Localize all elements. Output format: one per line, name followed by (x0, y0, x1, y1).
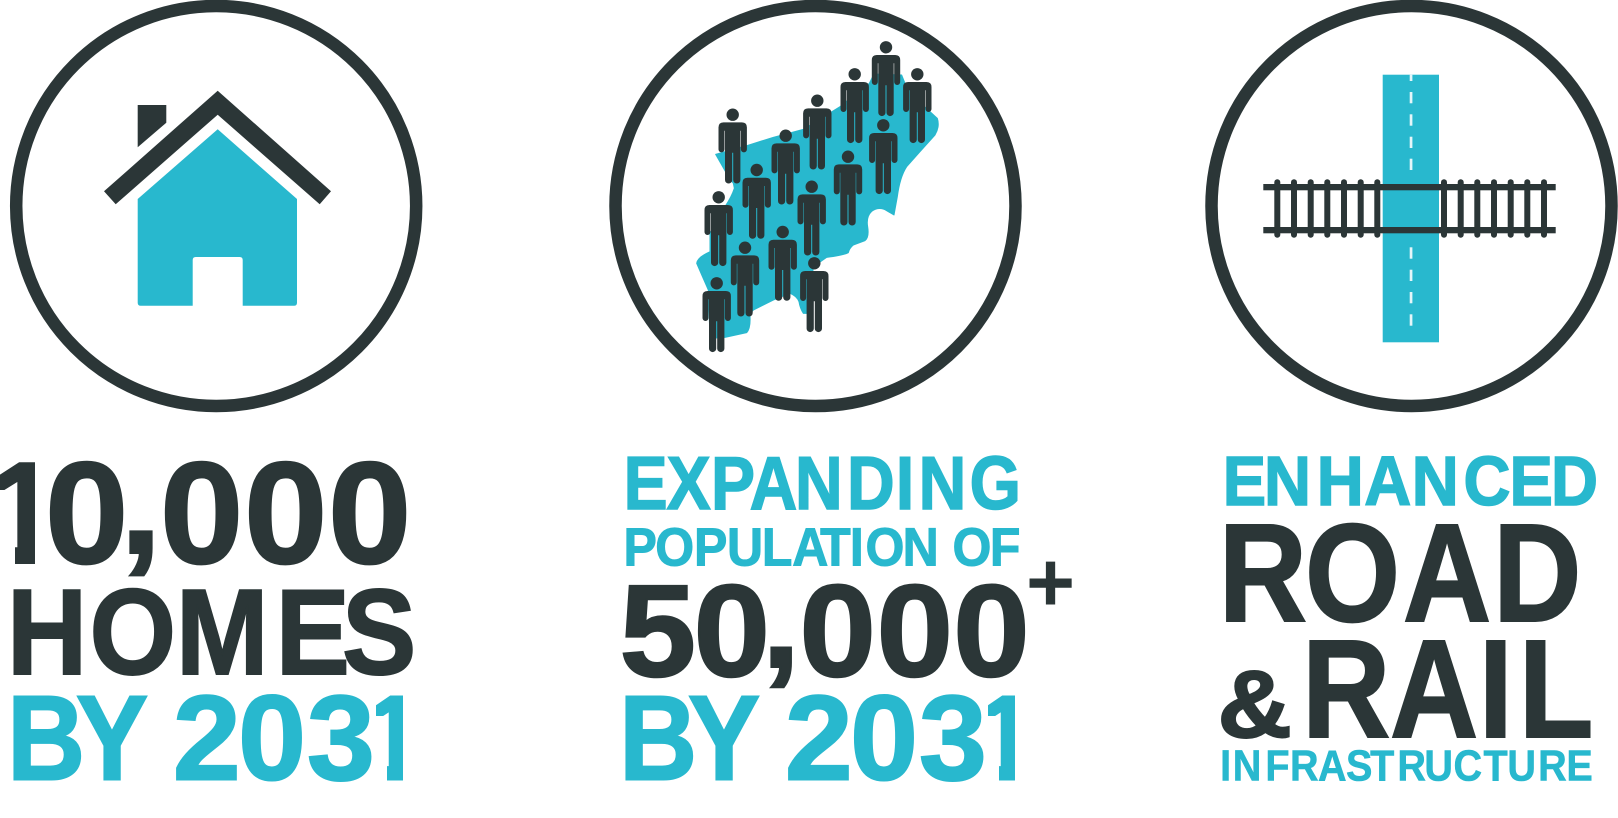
heading: by 2031 (13, 694, 403, 782)
chimney (138, 105, 166, 147)
roof (104, 91, 331, 204)
heading: 10,000 (0, 460, 406, 576)
map: region blob (697, 74, 938, 338)
panel: road and rail (1212, 6, 1612, 790)
heading: expanding: EXPANDING (624, 441, 1021, 525)
heading: by 2031: 1 (975, 671, 1039, 806)
panel: population (616, 6, 1075, 806)
house body (138, 129, 297, 306)
plus sign: + (1026, 535, 1075, 629)
heading: by 2031: 203 (785, 670, 987, 806)
heading: road: ROAD (1219, 494, 1581, 651)
heading: by 2031: 1 (363, 671, 427, 806)
heading: population of: POPULATION OF (624, 518, 1020, 578)
icon: road (1383, 75, 1439, 342)
heading: infrastructure: INFRASTRUCTURE (1220, 741, 1593, 790)
heading: rail: RAIL (1302, 610, 1593, 767)
icon: railway (1263, 179, 1556, 238)
icon: people (702, 41, 932, 352)
heading: 50,000: 50,000 (619, 549, 1030, 704)
heading: by 2031: BY (7, 671, 148, 806)
panel: homes (0, 6, 427, 806)
heading: enhanced: ENHANCED (1223, 443, 1598, 521)
heading: by 2031: BY (619, 671, 760, 806)
icon: house (104, 91, 331, 306)
heading: 10,000: 0,000 (45, 422, 411, 594)
circle: homes (16, 6, 416, 406)
ampersand: & (1218, 651, 1292, 758)
heading: homes: HOMES (7, 563, 416, 700)
circle: road and rail (1212, 6, 1612, 406)
heading: by 2031: 203 (173, 670, 375, 806)
circle: population (616, 6, 1016, 406)
heading: by 2031 (625, 694, 1015, 782)
